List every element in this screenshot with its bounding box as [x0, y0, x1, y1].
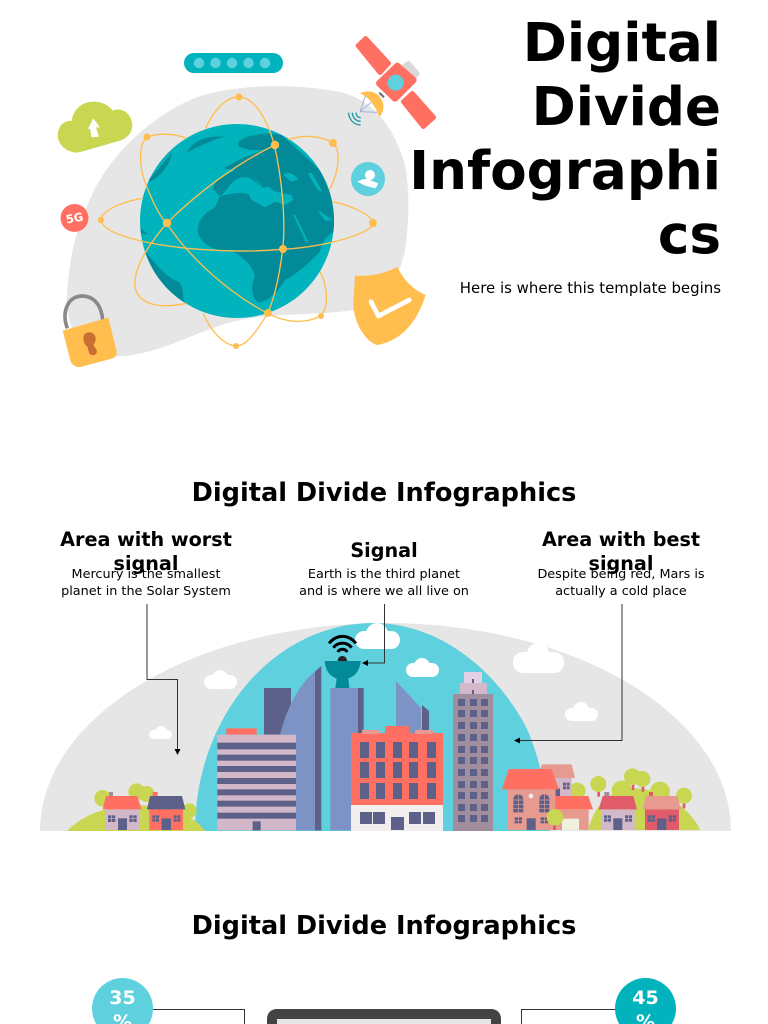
icon: password pill — [184, 53, 283, 73]
label: worst signal — [60, 528, 232, 575]
arrow: left percentage connector — [150, 1010, 244, 1024]
stat: 35 percent: 35 — [109, 987, 136, 1009]
text: signal description: and is where we all live on — [299, 584, 469, 598]
stat: 45 percent — [615, 978, 676, 1024]
arrow: right percentage connector — [522, 1010, 617, 1024]
stat: 45 percent: 45 — [632, 987, 659, 1009]
grey tall tower — [453, 672, 493, 831]
icon: 5G badge — [60, 204, 88, 232]
label: best signal: Area with best — [542, 528, 700, 551]
icon: padlock — [63, 296, 117, 367]
arrow: worst signal connector — [147, 604, 180, 755]
device screen — [267, 1009, 501, 1024]
striped office block — [217, 688, 296, 830]
subtitle: Here is where this template begins — [460, 279, 721, 297]
icon: satellite — [349, 38, 434, 127]
cyan strong signal dome — [195, 623, 550, 831]
icon: cloud upload — [58, 102, 132, 153]
text: worst signal description — [61, 566, 231, 598]
orbit rings — [101, 97, 373, 346]
grey signal dome — [40, 623, 731, 831]
label: worst signal: signal — [114, 552, 178, 575]
illustration: city signal dome — [40, 604, 731, 1024]
arrow: signal connector — [362, 604, 384, 666]
icon: user badge — [351, 162, 385, 196]
label: worst signal: Area with worst — [60, 528, 232, 551]
text: best signal description: actually a cold place — [555, 584, 687, 598]
clouds — [149, 623, 598, 739]
globe — [140, 124, 338, 318]
red central building — [351, 726, 443, 831]
left hill and small houses — [67, 783, 205, 831]
text: worst signal description: Mercury is the smallest — [72, 566, 220, 582]
label: best signal: signal — [589, 552, 653, 575]
blue curved tower — [280, 666, 364, 830]
text: worst signal description: planet in the Solar System — [61, 584, 231, 598]
heading: section three: Digital Divide Infographics — [192, 910, 576, 940]
grey blob backdrop — [67, 86, 408, 356]
illustration: connected globe and icons — [58, 36, 436, 368]
label: signal: Signal — [350, 539, 418, 562]
stat: 35 percent — [92, 978, 153, 1024]
heading: section two: Digital Divide Infographics — [192, 478, 576, 508]
text: signal description: Earth is the third planet — [308, 566, 460, 582]
label: best signal — [542, 528, 700, 575]
title: Digital — [523, 12, 721, 74]
satellite dish with wifi signal — [325, 636, 361, 688]
title: cs — [658, 204, 721, 266]
text: signal description — [299, 566, 469, 598]
icon: security shield — [353, 267, 426, 345]
orbit nodes — [98, 94, 377, 349]
text: best signal description: Despite being red, Mars is — [537, 566, 705, 582]
right hill, trees and houses — [502, 764, 700, 830]
back blue tower — [396, 681, 429, 733]
arrow: best signal connector — [514, 604, 622, 744]
title: Divide — [532, 76, 721, 138]
title — [409, 12, 721, 266]
title: Infographi — [409, 140, 721, 202]
icon: 5G badge: 5G — [65, 210, 84, 226]
text: best signal description — [537, 566, 705, 598]
